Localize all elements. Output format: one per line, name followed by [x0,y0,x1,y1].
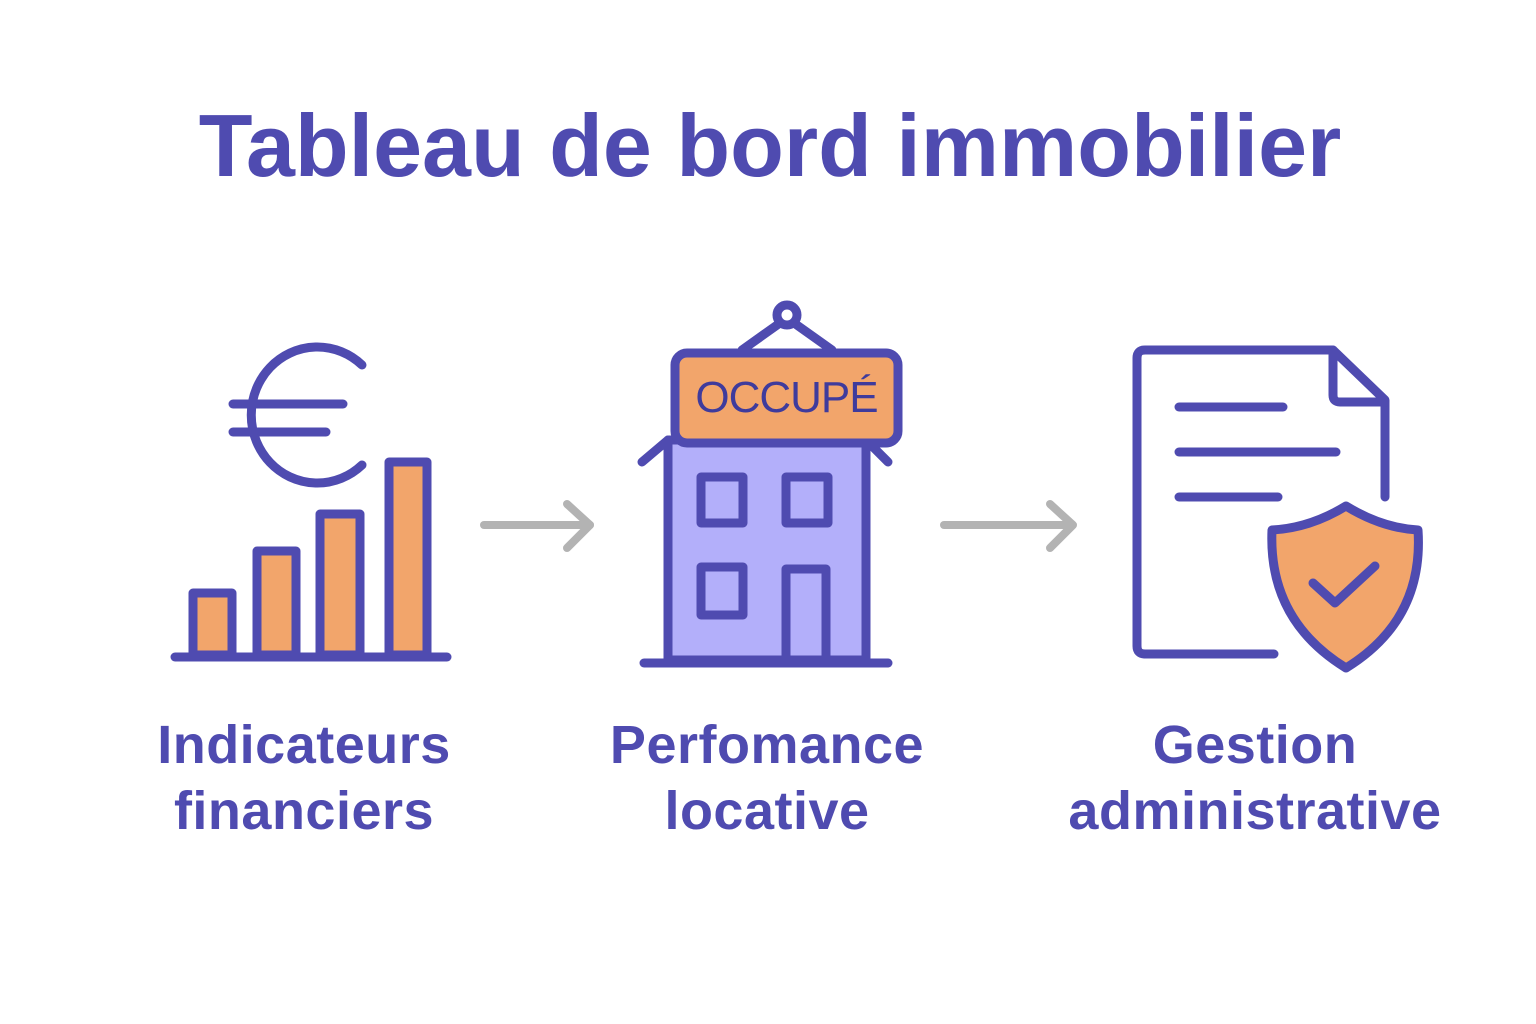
label: indicateurs [157,715,451,841]
label: gestion: Gestion [1153,715,1357,775]
label: gestion [1068,715,1442,841]
title: Tableau de bord immobilier [199,96,1341,195]
sign text: OCCUPÉ [695,373,878,422]
label: indicateurs: financiers [174,781,434,841]
label: performance: Perfomance [610,715,924,775]
label: performance: locative [664,781,870,841]
icon: document shield [1137,350,1418,668]
label: gestion: administrative [1068,781,1442,841]
icon: euro bar chart [175,347,447,657]
arrow 2 [944,504,1073,548]
label: performance [610,715,924,841]
arrow 1 [484,504,590,548]
label: indicateurs: Indicateurs [157,715,451,775]
icon: building occupied [642,305,898,663]
